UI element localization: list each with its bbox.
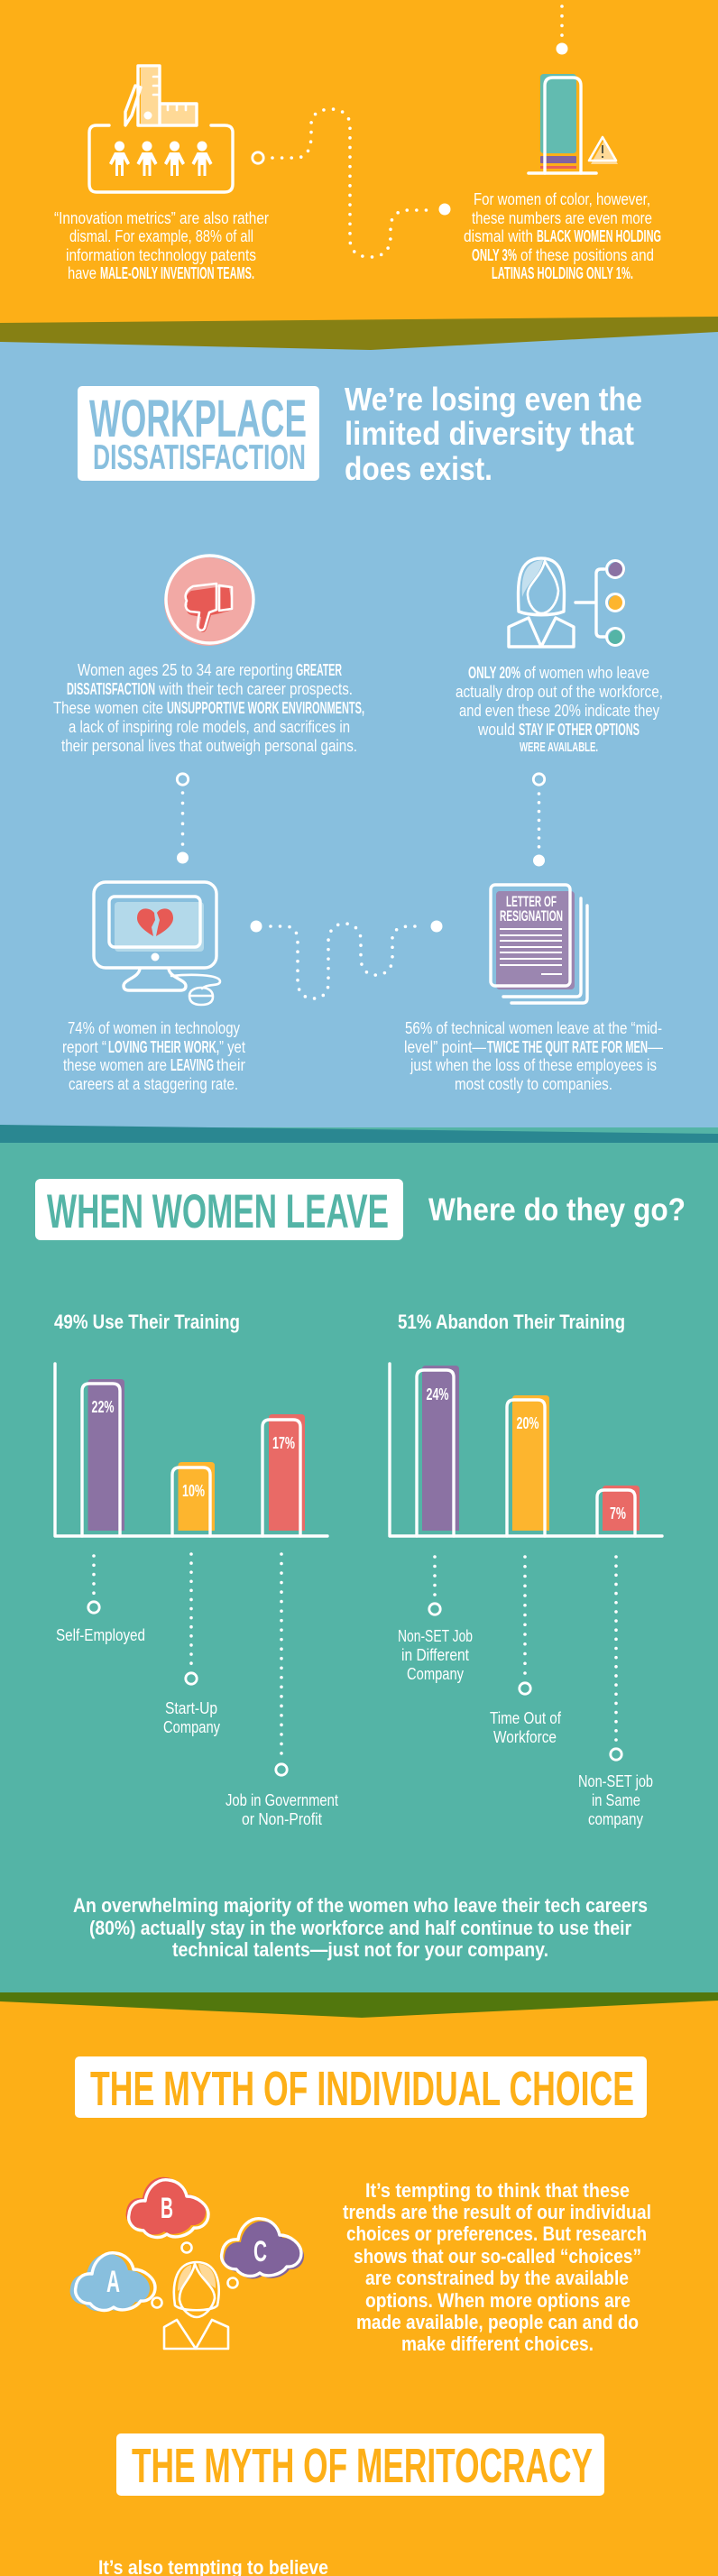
- text: only 20 percent: WERE AVAILABLE.: [520, 740, 598, 755]
- text: 74 percent: report “: [62, 1038, 106, 1056]
- label: non-set job same company: [578, 1557, 653, 1828]
- icon: letter of resignation: RESIGNATION: [500, 907, 563, 925]
- text: overwhelming majority summary: An overwhelming majority of the women who leave their tech careers: [73, 1894, 648, 1917]
- heading: workplace dissatisfaction: DISSATISFACTION: [93, 438, 306, 477]
- text: tempting to think: options. When more options are: [365, 2289, 631, 2312]
- bar chart: abandon their training: 7%: [610, 1504, 626, 1523]
- text: 74 percent: careers at a staggering rate.: [69, 1075, 238, 1093]
- band: olive divider: [0, 317, 718, 350]
- text: greater dissatisfaction: a lack of inspiring role models, and sacrifices in: [69, 718, 350, 736]
- icon: letter of resignation: [491, 885, 587, 1003]
- text: women of color: of these positions and: [520, 246, 654, 264]
- text: tempting to think: [343, 2179, 651, 2355]
- text: 74 percent: 74% of women in technology: [68, 1019, 240, 1037]
- text: innovation metrics: “Innovation metrics” are also rather: [54, 209, 269, 227]
- text: 74 percent: ” yet: [219, 1038, 245, 1056]
- section background: orange top: [0, 0, 718, 352]
- text: only 20 percent: ONLY 20%: [468, 664, 520, 682]
- text: tempting to think: trends are the result of our individual: [343, 2201, 651, 2223]
- icon: woman thinking of options A B C: A: [106, 2265, 120, 2299]
- text: innovation metrics: [54, 209, 269, 282]
- label: non-set job different company: [398, 1557, 473, 1683]
- subheading: losing diversity: We’re losing even the: [345, 381, 642, 418]
- text: greater dissatisfaction: UNSUPPORTIVE WORK ENVIRONMENTS,: [167, 699, 364, 717]
- chart title: abandon their training: 51% Abandon Their Training: [398, 1311, 625, 1333]
- subheading: where do they go: Where do they go?: [428, 1192, 686, 1228]
- text: women of color: these numbers are even more: [472, 209, 652, 227]
- text: innovation metrics: have: [68, 264, 97, 282]
- connector: left vertical dots: [177, 774, 189, 864]
- heading: workplace dissatisfaction: [78, 386, 319, 481]
- text: women of color: [464, 190, 661, 282]
- label: self-employed: [56, 1556, 145, 1644]
- text: 56 percent: level” point—: [404, 1038, 486, 1056]
- text: 56 percent: just when the loss of these employees is: [410, 1056, 657, 1074]
- connector: dotted wave bottom: [251, 920, 442, 998]
- text: innovation metrics: information technology patents: [66, 246, 256, 264]
- text: only 20 percent: and even these 20% indicate they: [459, 702, 659, 720]
- text: 56 percent: —: [648, 1038, 663, 1056]
- text: overwhelming majority summary: (80%) actually stay in the workforce and half continue to use their: [89, 1917, 631, 1939]
- label: start-up company: Start-Up: [165, 1699, 217, 1717]
- text: innovation metrics: dismal. For example, 88% of all: [69, 227, 253, 245]
- label: time out of workforce: Time Out of: [490, 1709, 562, 1727]
- band: dark teal divider: [0, 1125, 718, 1143]
- icon: woman thinking of options A B C: [70, 2177, 304, 2349]
- label: non-set job same company: company: [588, 1810, 643, 1828]
- text: women of color: LATINAS HOLDING ONLY 1%.: [492, 264, 633, 282]
- icon: monitor with broken heart: [94, 882, 220, 1005]
- text: only 20 percent: STAY IF OTHER OPTIONS: [519, 721, 640, 739]
- label: start-up company: [163, 1554, 220, 1736]
- section background: teal when women leave: [0, 1127, 718, 1998]
- bar chart: abandon their training: 20%: [516, 1414, 539, 1432]
- subheading: losing diversity: does exist.: [345, 450, 492, 487]
- text: 56 percent: most costly to companies.: [455, 1075, 612, 1093]
- chart title: use their training: 49% Use Their Training: [54, 1311, 240, 1333]
- label: time out of workforce: Workforce: [493, 1728, 557, 1746]
- section background: orange myths: [0, 1992, 718, 2576]
- bar chart: use their training: 10%: [182, 1482, 205, 1500]
- text: 74 percent: these women are: [63, 1056, 167, 1074]
- text: greater dissatisfaction: Women ages 25 to 34 are reporting: [78, 661, 293, 679]
- text: tempting to think: are constrained by the available: [365, 2267, 629, 2289]
- subheading: losing diversity: limited diversity that: [345, 415, 634, 452]
- text: overwhelming majority summary: [73, 1894, 648, 1961]
- text: only 20 percent: actually drop out of the workforce,: [456, 683, 663, 701]
- label: non-set job same company: Non-SET job: [578, 1772, 653, 1790]
- bar chart: abandon their training: 24%: [426, 1385, 449, 1403]
- text: 74 percent: LEAVING: [170, 1056, 214, 1074]
- text: tempting to think: It’s tempting to think that these: [365, 2179, 630, 2202]
- text: greater dissatisfaction: with their tech career prospects.: [158, 680, 353, 698]
- label: government or non-profit: Job in Government: [226, 1791, 338, 1809]
- text: greater dissatisfaction: DISSATISFACTION: [67, 680, 155, 698]
- text: only 20 percent: [456, 664, 663, 755]
- label: non-set job different company: in Different: [401, 1646, 469, 1664]
- label: time out of workforce: [490, 1557, 562, 1746]
- text: tempting to think: shows that our so-called “choices”: [354, 2245, 641, 2268]
- section background: blue workplace dissatisfaction: [0, 325, 718, 1136]
- icon: letter of resignation: LETTER OF: [506, 893, 557, 910]
- subheading: losing diversity: [345, 381, 642, 487]
- icon: woman with option branches: [509, 558, 625, 647]
- text: 56 percent: [404, 1019, 663, 1093]
- text: 74 percent: their: [216, 1056, 245, 1074]
- connector: dotted wave top: [253, 109, 451, 257]
- text: greater dissatisfaction: [53, 661, 364, 755]
- connector: dotted line into top right chart: [556, 6, 568, 54]
- connector: right vertical dots: [533, 774, 545, 866]
- heading: when women leave: WHEN WOMEN LEAVE: [47, 1185, 389, 1238]
- icon: woman thinking of options A B C: B: [161, 2192, 173, 2224]
- text: women of color: For women of color, however,: [474, 190, 650, 208]
- label: non-set job different company: Company: [407, 1665, 464, 1683]
- text: only 20 percent: would: [477, 721, 515, 739]
- text: tempting to think: choices or preferences. But research: [346, 2222, 647, 2245]
- heading: when women leave: [35, 1179, 403, 1240]
- label: government or non-profit: or Non-Profit: [242, 1810, 322, 1828]
- heading: workplace dissatisfaction: WORKPLACE: [89, 390, 307, 448]
- text: women of color: dismal with: [464, 227, 533, 245]
- bar chart: use their training: 17%: [272, 1434, 295, 1452]
- label: self-employed: Self-Employed: [56, 1626, 145, 1644]
- icon: thumbs down: [164, 556, 253, 646]
- text: only 20 percent: of women who leave: [524, 664, 649, 682]
- icon: woman thinking of options A B C: C: [253, 2235, 267, 2268]
- icon: bar with warning sign: [529, 74, 618, 173]
- text: tempting to think: made available, people can and do: [356, 2311, 639, 2333]
- text: innovation metrics: MALE-ONLY INVENTION TEAMS.: [100, 264, 254, 282]
- text: greater dissatisfaction: GREATER: [296, 661, 342, 679]
- bar chart: use their training: [55, 1364, 327, 1536]
- bar chart: use their training: 22%: [92, 1398, 114, 1416]
- text: 74 percent: [62, 1019, 245, 1093]
- label: non-set job different company: Non-SET Job: [398, 1627, 473, 1645]
- label: non-set job same company: in Same: [592, 1791, 640, 1809]
- text: 74 percent: LOVING THEIR WORK,: [108, 1038, 219, 1056]
- text: 56 percent: 56% of technical women leave at the “mid-: [405, 1019, 662, 1037]
- text: tempting to think: make different choices.: [401, 2332, 594, 2355]
- band: green divider: [0, 1992, 718, 2018]
- label: government or non-profit: [226, 1554, 338, 1828]
- text: overwhelming majority summary: technical talents—just not for your company.: [172, 1938, 548, 1961]
- bar chart: abandon their training: [390, 1364, 662, 1536]
- text: women of color: ONLY 3%: [472, 246, 517, 264]
- text: greater dissatisfaction: their personal lives that outweigh personal gains.: [61, 737, 357, 755]
- text: greater dissatisfaction: These women cite: [53, 699, 163, 717]
- label: start-up company: Company: [163, 1718, 220, 1736]
- icon: patents team with ruler and pencil: [89, 66, 233, 192]
